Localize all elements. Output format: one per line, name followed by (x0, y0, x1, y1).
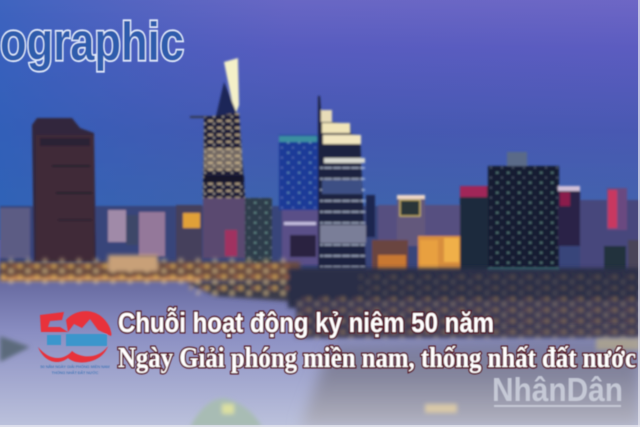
distant low-rise buildings (0, 200, 640, 281)
large dark tower right (488, 152, 559, 294)
orange lit buildings (372, 236, 460, 296)
logo: red 50 mark (38, 311, 111, 362)
river water (0, 270, 640, 427)
50th anniversary logo (38, 311, 111, 375)
50th anniversary logo: THỐNG NHẤT ĐẤT NƯỚC (52, 370, 99, 375)
mid-ground block beside Bitexco (176, 198, 272, 265)
title line 1: Chuỗi hoạt động kỷ niệm 50 năm (118, 307, 494, 338)
logo: caption: 50 NĂM NGÀY GIẢI PHÓNG MIỀN NAM (40, 364, 110, 369)
logo: blue band (47, 334, 107, 346)
pink tower far right (607, 188, 627, 230)
dark brown tower left (32, 118, 96, 262)
right foreground tower (604, 240, 640, 298)
stepped tower centre (318, 96, 366, 270)
waterfront lights (0, 255, 640, 338)
watermark: NhânDân: NhânDân (492, 371, 623, 408)
crown building (397, 195, 425, 246)
Bitexco tower (190, 58, 245, 258)
pink roof tower (460, 186, 488, 296)
blue lit tower (279, 135, 318, 265)
narrow dark tower (366, 195, 375, 237)
lower-right fading foreground (0, 330, 640, 427)
partial heading: ographic: ographic (0, 12, 184, 72)
sky background (0, 0, 640, 240)
city skyline (0, 58, 640, 298)
red tower (558, 186, 580, 246)
